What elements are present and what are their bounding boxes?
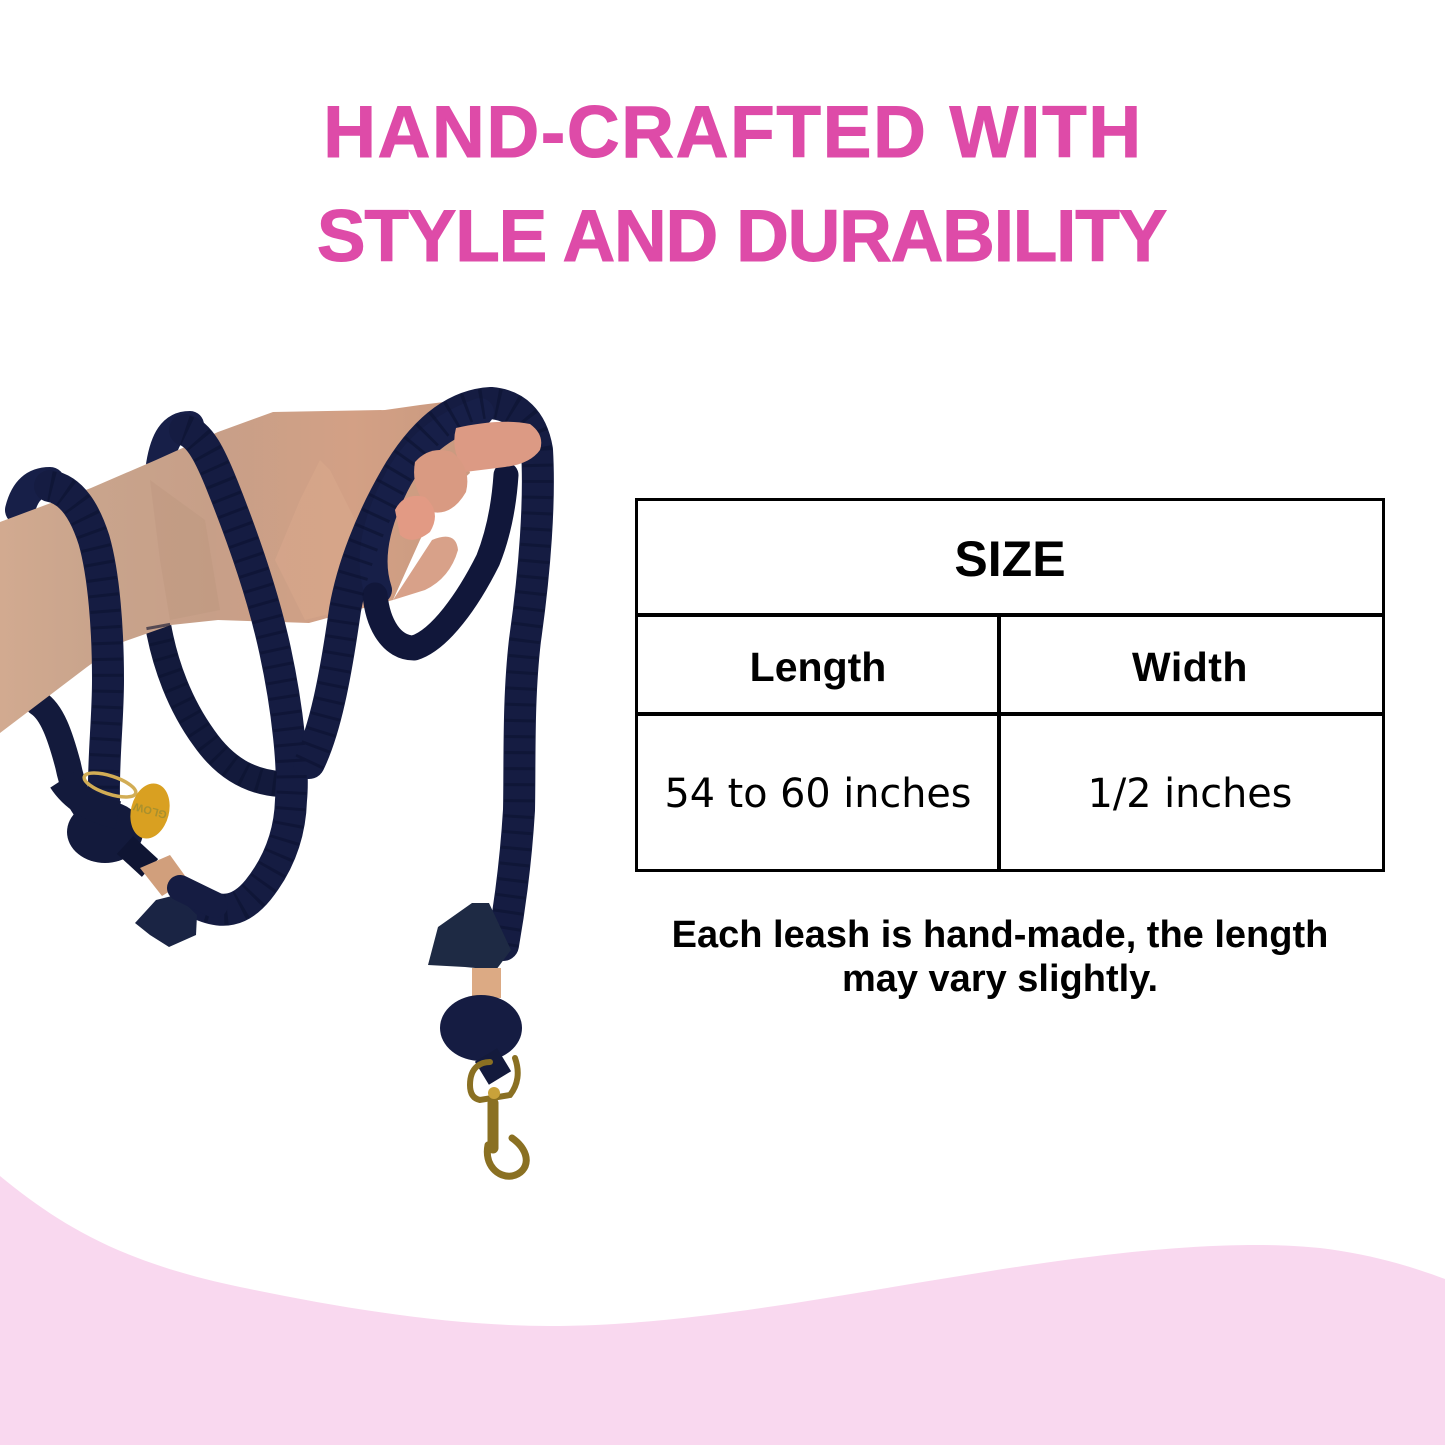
fingers xyxy=(393,422,541,600)
rope strand behind hand xyxy=(20,425,280,815)
table outline xyxy=(635,498,1385,872)
icon: gold ring and tag xyxy=(82,768,175,843)
rope: leash strands xyxy=(50,403,538,945)
column: width: Width xyxy=(1132,644,1248,690)
note: may vary slightly. xyxy=(842,958,1158,1000)
icon: hand xyxy=(0,402,470,733)
icon: brass snap hook xyxy=(470,1058,526,1176)
title: HAND-CRAFTED WITH xyxy=(323,92,1143,173)
heading: size: SIZE xyxy=(954,531,1066,587)
title xyxy=(317,92,1167,277)
value: length: 54 to 60 inches xyxy=(665,771,971,817)
size table xyxy=(635,498,1385,872)
knot: snap end xyxy=(428,903,522,1078)
photo: hand holding navy rope leash xyxy=(0,387,554,1180)
value: width: 1/2 inches xyxy=(1088,771,1292,817)
background wave xyxy=(0,1176,1445,1445)
knot: handle xyxy=(62,780,215,947)
note xyxy=(672,914,1328,1000)
column: length: Length xyxy=(750,644,886,690)
icon: gold ring and tag: GLOW xyxy=(132,800,168,820)
title: STYLE AND DURABILITY xyxy=(317,196,1166,277)
note: Each leash is hand-made, the length xyxy=(672,914,1328,956)
